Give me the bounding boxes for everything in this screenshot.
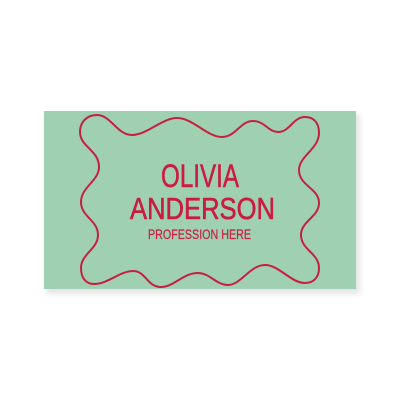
card background [44,111,356,289]
profession subtitle: PROFESSION HERE [148,226,251,242]
name: second line: ANDERSON [130,191,275,226]
card shadow [46,114,360,294]
name: first line: OLIVIA [161,158,239,194]
wavy border frame [80,115,319,287]
